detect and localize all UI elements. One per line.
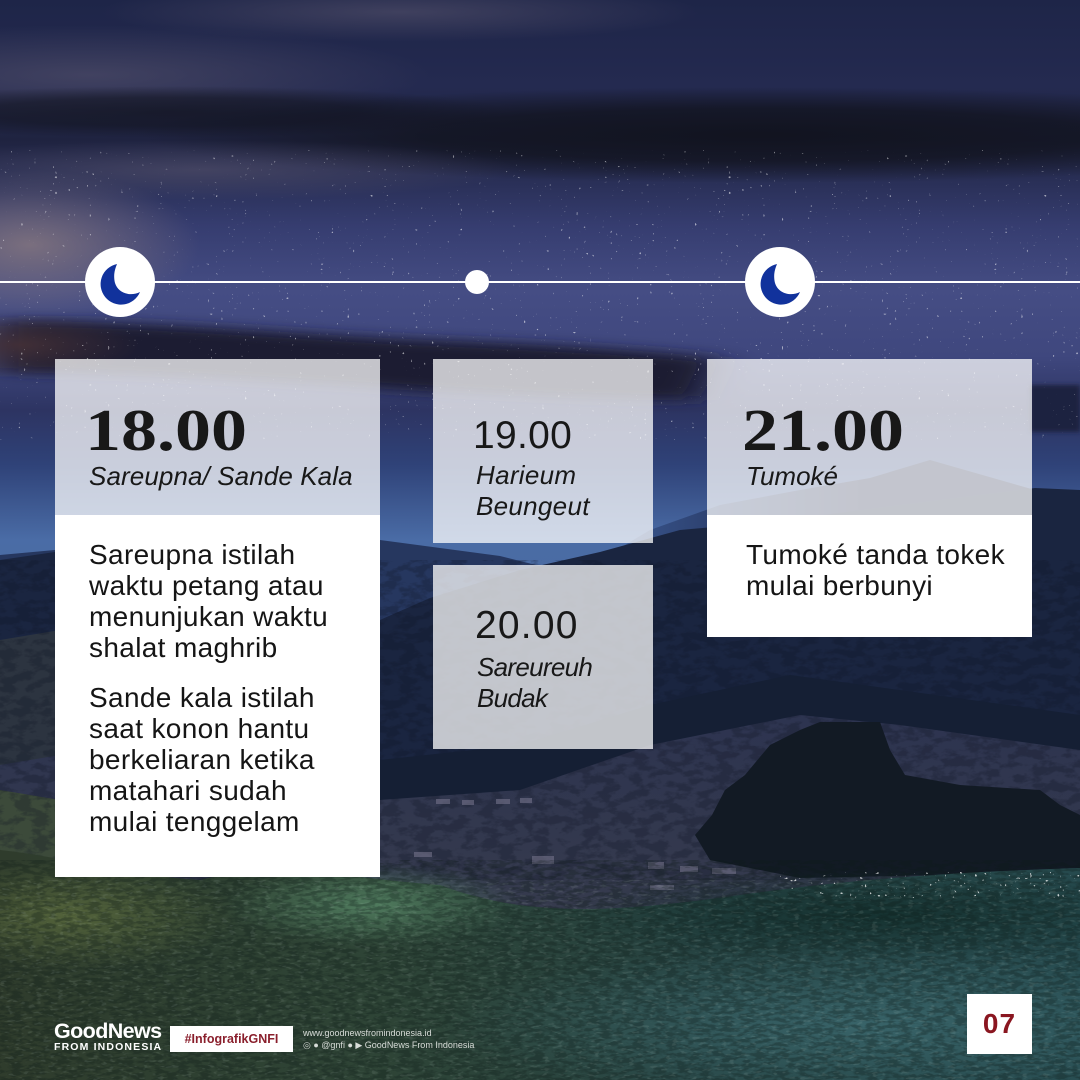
hashtag badge: #InfografikGNFI [185,1032,278,1046]
text: Sande kala description: mulai tenggelam [89,806,300,837]
text: Sande kala description: Sande kala istilah [89,682,315,713]
lower dark cloud [0,321,720,400]
icon: moon marker left [85,247,155,317]
footer: social links: ◎ ● @gnfi ● ▶ GoodNews From Indonesia [303,1040,474,1050]
name: Tumoke: Tumoké [746,461,838,491]
name: Sareureuh Budak [477,652,592,713]
white flowers [780,872,1080,898]
page number [967,994,1032,1054]
name: Sareureuh Budak: Budak [477,683,547,713]
icon: moon marker right [745,247,815,317]
text: Sareupna description: Sareupna istilah [89,539,295,570]
grass meadow [0,850,1080,1080]
text: Sareupna description: shalat maghrib [89,632,278,663]
panel: 18.00 Sareupna [55,359,380,877]
dark mountain [0,488,1080,1000]
hashtag badge [170,1026,293,1052]
valley fields [0,695,1080,1000]
time: 20.00: 20.00 [475,604,579,647]
far hill and peak [600,460,1080,1000]
forest [695,722,1080,878]
panel body: description [55,515,380,877]
name: Harieum Beungeut: Beungeut [476,491,590,521]
text: Sande kala description: saat konon hantu [89,713,309,744]
time: 21.00: 21.00 [742,397,904,463]
timeline middle dot [465,270,489,294]
time: 18.00: 18.00 [85,397,247,463]
upper dark cloud [140,87,1080,183]
panel: 19.00 Harieum Beungeut [433,359,653,543]
panel header: 21.00 [707,359,1032,515]
panel body: description [707,515,1032,637]
timeline line [0,281,1080,283]
village [414,798,736,890]
name: Harieum Beungeut [476,460,590,521]
text: Sande kala description: berkeliaran ketika [89,744,315,775]
warm tint left horizon [0,170,200,320]
text: Sareupna description: menunjukan waktu [89,601,328,632]
name: Sareureuh Budak: Sareureuh [477,652,592,682]
page number: 07 [983,1008,1016,1039]
panel: 20.00 Sareureuh Budak [433,565,653,749]
panel header: 18.00 [55,359,380,515]
stars [0,150,1080,440]
panel: 21.00 Tumoke [707,359,1032,637]
text: Tumoke description [746,539,1005,601]
logo: GoodNews From Indonesia: GoodNews [54,1019,162,1043]
text: Sareupna description [89,539,328,663]
name: Harieum Beungeut: Harieum [476,460,576,490]
mid left hill [0,540,540,1000]
time: 19.00: 19.00 [473,414,572,457]
tree band [380,675,1080,800]
logo: GoodNews From Indonesia: FROM INDONESIA [54,1041,162,1053]
land texture [0,560,1080,880]
text: Tumoke description: mulai berbunyi [746,570,933,601]
text: Sareupna description: waktu petang atau [89,570,324,601]
footer: social links [303,1028,474,1050]
text: Sande kala description [89,682,315,837]
footer: social links: www.goodnewsfromindonesia.id [303,1028,432,1038]
name: Sareupna/ Sande Kala: Sareupna/ Sande Kala [89,461,353,491]
text: Tumoke description: Tumoké tanda tokek [746,539,1005,570]
text: Sande kala description: matahari sudah [89,775,287,806]
